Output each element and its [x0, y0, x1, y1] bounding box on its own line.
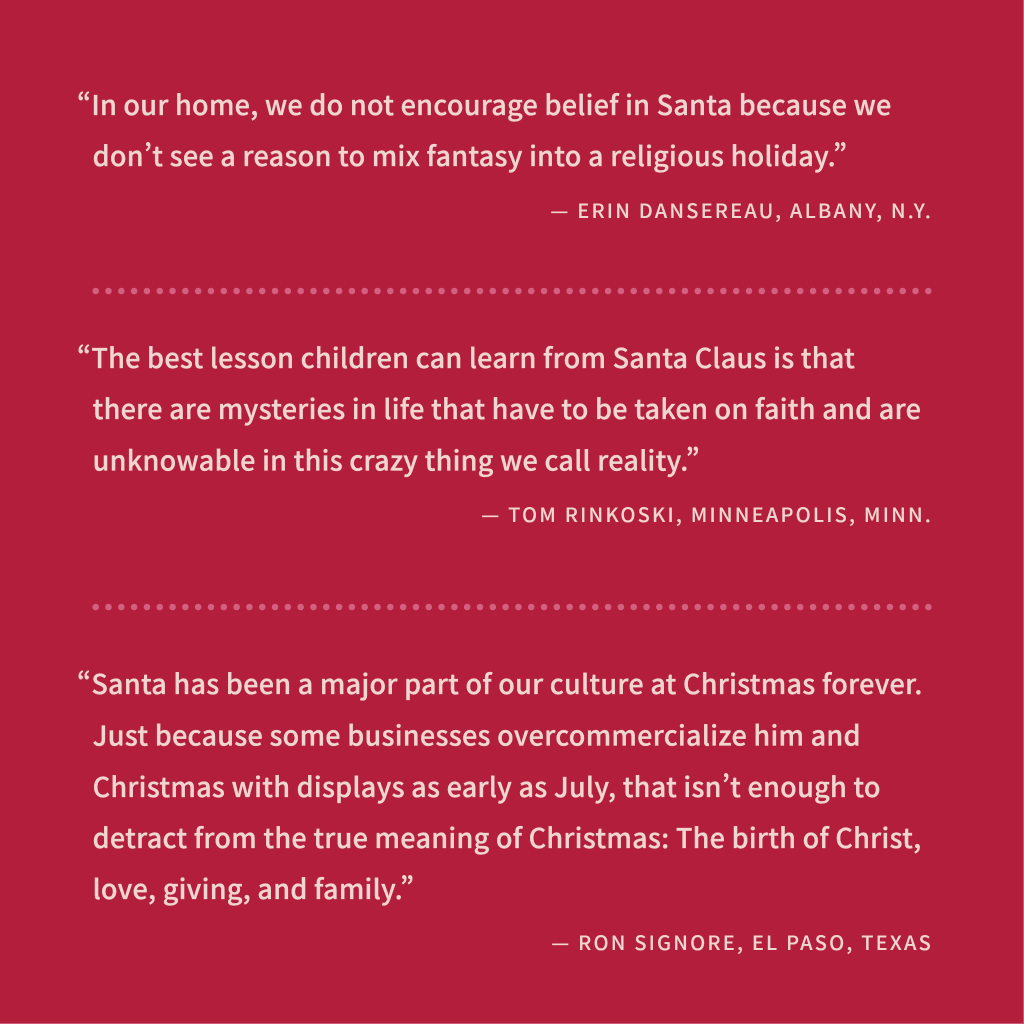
quote block 2: “The best lesson children can learn from Santa Claus is that: [77, 337, 855, 376]
quote block 3: love, giving, and family.”: [93, 868, 414, 907]
quote block 3: “Santa has been a major part of our culture at Christmas forever.: [77, 663, 923, 702]
quote block 2: unknowable in this crazy thing we call reality.”: [93, 440, 700, 478]
quote block 1: don’t see a reason to mix fantasy into a religious holiday.”: [93, 135, 847, 174]
dotted divider 1: [96, 288, 930, 294]
quote block 3: Christmas with displays as early as July, that isn’t enough to: [93, 766, 881, 805]
quote block 1: [77, 84, 933, 224]
edge line: bottom: [0, 1023, 1024, 1024]
edge line: right: [1023, 0, 1024, 1024]
attribution 2: — TOM RINKOSKI, MINNEAPOLIS, MINN.: [481, 499, 933, 528]
dotted divider 2: [96, 604, 930, 610]
attribution 1: — ERIN DANSEREAU, ALBANY, N.Y.: [550, 195, 933, 224]
quote block 3: detract from the true meaning of Christmas: The birth of Christ,: [93, 817, 921, 856]
quote block 2: there are mysteries in life that have to be taken on faith and are: [93, 388, 921, 427]
quote block 2: [77, 337, 933, 528]
quote block 3: [77, 663, 933, 956]
quote block 1: “In our home, we do not encourage belief in Santa because we: [77, 84, 892, 123]
attribution 3: — RON SIGNORE, EL PASO, TEXAS: [551, 927, 933, 956]
quote block 3: Just because some businesses overcommercialize him and: [93, 714, 861, 754]
